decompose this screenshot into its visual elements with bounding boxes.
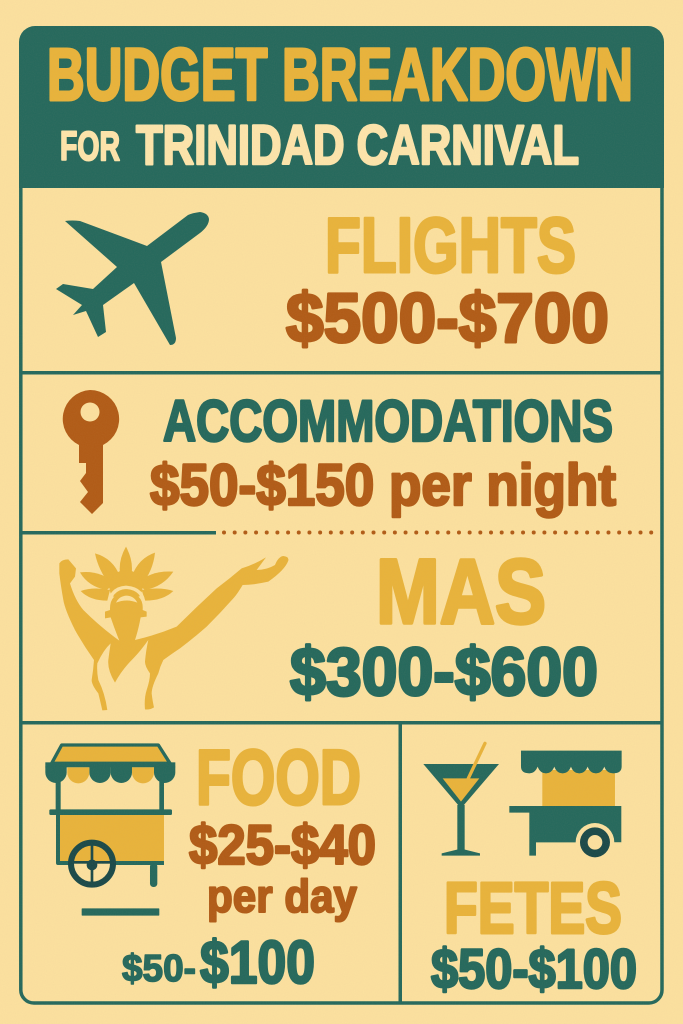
- price: mas: $300-$600: [290, 634, 598, 710]
- heading: flights: FLIGHTS: [325, 201, 576, 289]
- icon: martini glass: [423, 743, 499, 856]
- price: accommodations: $50-$150 per night: [150, 453, 616, 518]
- heading: mas: MAS: [376, 541, 546, 643]
- panel: mas: [59, 541, 598, 710]
- panel: food: [45, 733, 376, 996]
- icon: fete stall: [509, 751, 622, 862]
- heading: food: FOOD: [196, 733, 361, 821]
- divider: [20, 721, 663, 724]
- divider: [20, 531, 216, 534]
- icon: key: [63, 390, 119, 514]
- panel: accommodations: [63, 389, 616, 518]
- heading: fetes: FETES: [444, 869, 622, 949]
- icon: food cart: [45, 745, 175, 916]
- price: fetes: $50-$100: [431, 937, 637, 1000]
- price: flights: $500-$700: [286, 279, 609, 357]
- header banner: [19, 26, 664, 188]
- icon: airplane: [56, 212, 209, 345]
- subtitle: for: FOR: [60, 123, 120, 169]
- label: per day: per day: [207, 870, 357, 922]
- panel: flights: [56, 201, 609, 357]
- small price prefix: $50-: [122, 948, 196, 990]
- divider: [20, 371, 663, 374]
- panel: fetes: [423, 743, 637, 1000]
- price: food per day: $25-$40: [189, 813, 376, 876]
- large price suffix: $100: [200, 929, 315, 996]
- icon: masquerader figure: [59, 547, 288, 710]
- outer frame: [21, 188, 662, 1003]
